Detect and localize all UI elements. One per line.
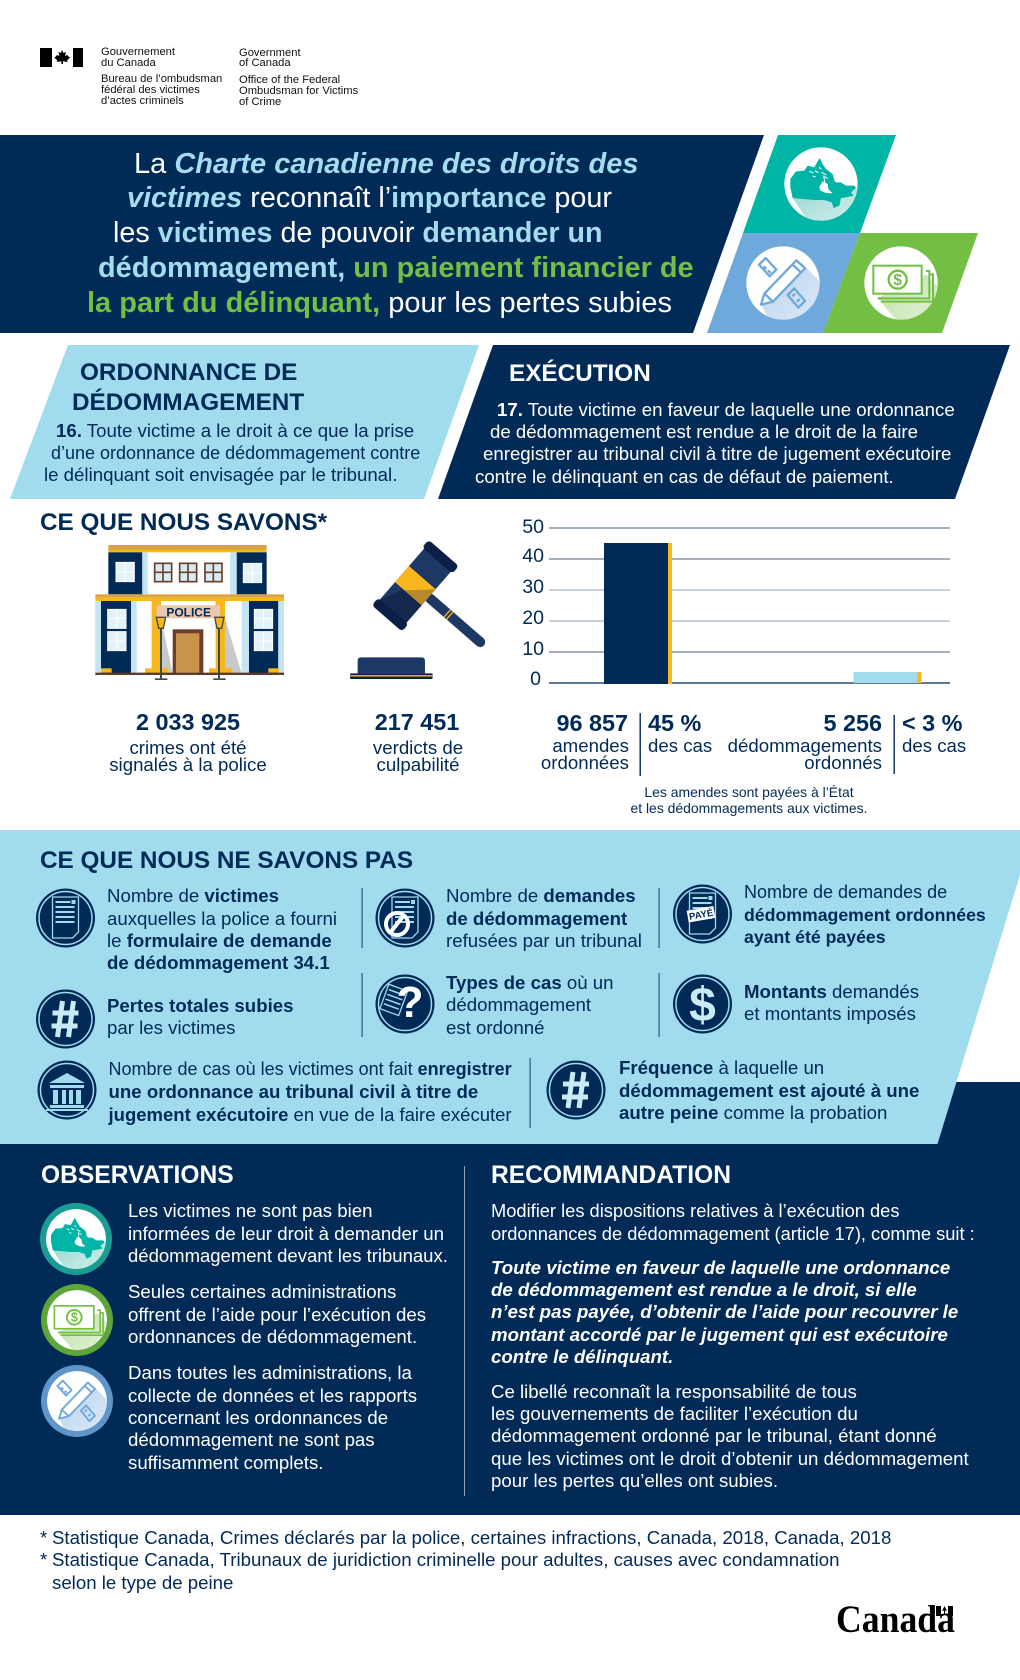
heading: CE QUE NOUS NE SAVONS PAS [40,847,413,874]
bar: amendes 45 % [604,543,672,684]
text: ordonnances de dédommagement. [128,1326,417,1347]
axis labels: 40 [522,545,544,567]
text [446,885,642,951]
text: une ordonnance au tribunal civil à titre de [108,1081,478,1102]
stat: crimes [109,709,267,775]
footnotes: selon le type de peine [52,1572,233,1593]
heading: DÉDOMMAGEMENT [72,388,304,416]
text: par les victimes [107,1017,235,1038]
proposed wording: montant accordé par le jugement qui est exécutoire [491,1324,948,1345]
axis labels: 50 [522,516,544,538]
observation 2 [41,1281,426,1374]
icon: pencil and ruler [746,246,850,350]
panel: exécution [438,345,1010,499]
intro text: Modifier les dispositions relatives à l’exécution des [491,1200,899,1221]
text: dédommagement devant les tribunaux. [128,1245,448,1266]
text: offrent de l’aide pour l’exécution des [128,1304,426,1325]
stat: amendes [541,710,712,776]
text: collecte de données et les rapports [128,1385,417,1406]
heading [72,359,304,416]
icon: police station: POLICE [166,605,211,619]
text: le formulaire de demande [107,930,332,951]
icon: tools ring [41,1365,131,1455]
observation 1 [40,1200,448,1293]
text [128,1200,448,1266]
text [619,1057,919,1123]
text: logo English: of Crime [239,96,281,108]
icon: small flag [936,1606,953,1616]
text block: d’une ordonnance de dédommagement contre [51,443,420,463]
text: logo French: fédéral des victimes [101,84,200,96]
text: Montants demandés [744,981,919,1002]
text: Pertes totales subies [107,995,294,1016]
item: pertes [36,990,294,1048]
panel: ce que nous ne savons pas [0,830,1020,1144]
logo: Canada wordmark: Canada [836,1598,955,1641]
footnotes: * [40,1549,47,1570]
item: demandes refusées [376,885,642,951]
banner icons [707,135,978,350]
text [108,1059,512,1125]
stat: dédommagements: ordonnés [804,752,882,773]
text: logo English: Office of the Federal [239,74,340,86]
stat: verdicts: culpabilité [377,754,459,775]
text [744,981,919,1024]
axis labels: 20 [522,607,544,629]
text: jugement exécutoire en vue de la faire exécuter [108,1104,512,1125]
text: logo English [239,47,359,108]
item: fréquence [546,1057,919,1123]
text: Nombre de victimes [107,885,279,906]
footnotes: Statistique Canada, Crimes déclarés par la police, certaines infractions, Canada, 2018, Canada, 2018 [52,1527,891,1548]
icon: paid document: PAYÉ [688,908,714,923]
bar chart [522,516,950,690]
icon: question [376,974,434,1034]
intro text [491,1200,975,1244]
text: Types de cas où un [446,972,614,993]
text block: 17. Toute victime en faveur de laquelle une ordonnance [497,399,955,420]
stat: verdicts: 217 451 [375,709,459,735]
icon: paid document [673,884,732,944]
icon: Canada map [784,147,888,251]
icon: police station [95,545,284,680]
text [107,885,337,973]
title [87,148,694,319]
text: est ordonné [446,1017,544,1038]
closing text: dédommagement ordonné par le tribunal, étant donné [491,1425,937,1446]
note: fines and restitution [630,784,868,816]
title: victimes reconnaît l’importance pour [127,182,612,214]
icon: money ring [41,1284,131,1374]
item: enregistrement [38,1059,512,1125]
observation 3 [41,1362,417,1473]
closing text [491,1381,969,1491]
heading: ce que nous savons: CE QUE NOUS SAVONS* [40,509,328,536]
icon: hash [546,1060,606,1120]
icon: dollar [673,974,732,1034]
text: logo French [101,46,222,107]
text: de dédommagement [446,908,627,929]
title: La Charte canadienne des droits des [134,148,638,180]
stat: crimes: crimes ont été [129,737,247,758]
closing text: pour les pertes qu’elles ont subies. [491,1470,778,1491]
text [446,972,614,1038]
text: Fréquence à laquelle un [619,1057,824,1078]
panel: observations [40,1162,448,1473]
text: logo French: Gouvernement [101,46,176,58]
text [744,882,986,947]
stat: dédommagements [728,710,966,774]
axis labels [522,516,544,690]
footnotes [40,1527,891,1593]
icon: money [864,246,968,350]
note: fines and restitution: et les dédommagements aux victimes. [630,800,868,816]
text: logo English: of Canada [239,57,291,69]
proposed wording: n’est pas payée, d’obtenir de l’aide pour recouvrer le [491,1301,958,1322]
text [128,1281,426,1347]
text: logo English: Government [239,47,301,59]
text: Nombre de demandes de [744,882,947,902]
text: Nombre de demandes [446,885,636,906]
icon: document [36,888,95,948]
text [128,1362,417,1473]
text block: contre le délinquant en cas de défaut de paiement. [475,466,894,487]
title: la part du délinquant, pour les pertes subies [87,287,672,319]
closing text: les gouvernements de faciliter l’exécution du [491,1403,858,1424]
icon: question: ? [397,978,423,1027]
icon: courthouse [38,1060,96,1120]
text: informées de leur droit à demander un [128,1223,444,1244]
stat: amendes: ordonnées [541,752,629,773]
text: logo French: Bureau de l’ombudsman [101,73,222,85]
item: montants [673,974,919,1034]
intro text: ordonnances de dédommagement (article 17), comme suit : [491,1223,975,1244]
note: fines and restitution: Les amendes sont payées à l’État [644,784,854,800]
text: logo French: d’actes criminels [101,95,184,107]
stat: dédommagements: < 3 % [902,710,963,736]
panel: ordonnance de dédommagement [10,345,479,499]
proposed wording [491,1257,958,1367]
text: concernant les ordonnances de [128,1407,388,1428]
text: et montants imposés [744,1003,916,1024]
panel: recommandation [491,1162,975,1491]
stat: amendes: amendes [552,735,629,756]
item: types de cas [376,972,614,1038]
stat: verdicts: verdicts de [373,737,463,758]
stat: verdicts [373,709,463,775]
text: autre peine comme la probation [619,1102,887,1123]
item: formulaire [36,885,337,973]
text: dédommagement est ajouté à une [619,1080,919,1101]
icon: refused document [376,888,434,948]
footnotes: * [40,1527,47,1548]
heading: RECOMMANDATION [491,1162,731,1189]
text: refusées par un tribunal [446,930,642,951]
logo: Government of Canada signature [40,46,359,108]
text [107,995,294,1038]
stat: dédommagements: dédommagements [728,735,882,756]
text: dédommagement ordonnées [744,905,986,925]
stat: amendes: 96 857 [556,710,628,736]
stat: amendes: 45 % [648,710,702,736]
icon: gavel [350,540,512,679]
stat: amendes: des cas [648,735,712,756]
text block [475,399,955,487]
text: Seules certaines administrations [128,1281,396,1302]
stat: crimes: 2 033 925 [136,709,240,735]
text: dédommagement [446,994,592,1015]
text: logo English: Ombudsman for Victims [239,85,359,97]
icon: dollar: $ [689,979,716,1032]
text: logo French: du Canada [101,57,157,69]
text block: enregistrer au tribunal civil à titre de jugement exécutoire [483,443,951,464]
heading: EXÉCUTION [509,359,651,387]
text block: le délinquant soit envisagée par le tribunal. [44,464,397,485]
title: dédommagement, un paiement financier de [98,252,694,284]
title: les victimes de pouvoir demander un [113,217,603,249]
proposed wording: de dédommagement est rendue a le droit, si elle [491,1279,917,1300]
text: dédommagement ne sont pas [128,1429,375,1450]
item: demandes payées [673,882,986,947]
closing text: Ce libellé reconnaît la responsabilité de tous [491,1381,857,1402]
axis labels: 30 [522,576,544,598]
text: Nombre de cas où les victimes ont fait enregistrer [108,1059,512,1079]
text block [44,420,420,485]
banner: Charter headline [0,135,764,333]
heading: OBSERVATIONS [41,1162,234,1189]
proposed wording: Toute victime en faveur de laquelle une ordonnance [491,1257,950,1278]
text: ayant été payées [744,927,886,947]
bar: dédommagements 3 % [854,672,922,683]
stat: dédommagements: 5 256 [823,710,882,736]
icon: hash [36,990,95,1048]
stat: crimes: signalés à la police [109,754,267,775]
icon: Canadian flag [40,48,83,67]
footnotes: Statistique Canada, Tribunaux de juridiction criminelle pour adultes, causes avec condamnation [52,1549,840,1570]
text: Les victimes ne sont pas bien [128,1200,373,1221]
text: Dans toutes les administrations, la [128,1362,413,1383]
axis labels: 0 [530,668,541,690]
text: auxquelles la police a fourni [107,908,337,929]
proposed wording: contre le délinquant. [491,1346,673,1367]
icon: Canada map ring [40,1203,130,1293]
text block: 16. Toute victime a le droit à ce que la prise [56,420,414,441]
closing text: que les victimes ont le droit d’obtenir un dédommagement [491,1448,969,1469]
text block: de dédommagement est rendue a le droit de la faire [490,421,918,442]
text: de dédommagement 34.1 [107,952,330,973]
heading: ORDONNANCE DE [80,359,297,386]
axis labels: 10 [522,638,544,660]
text: suffisamment complets. [128,1452,323,1473]
panel: navy background [0,1082,1020,1515]
stat: dédommagements: des cas [902,735,966,756]
